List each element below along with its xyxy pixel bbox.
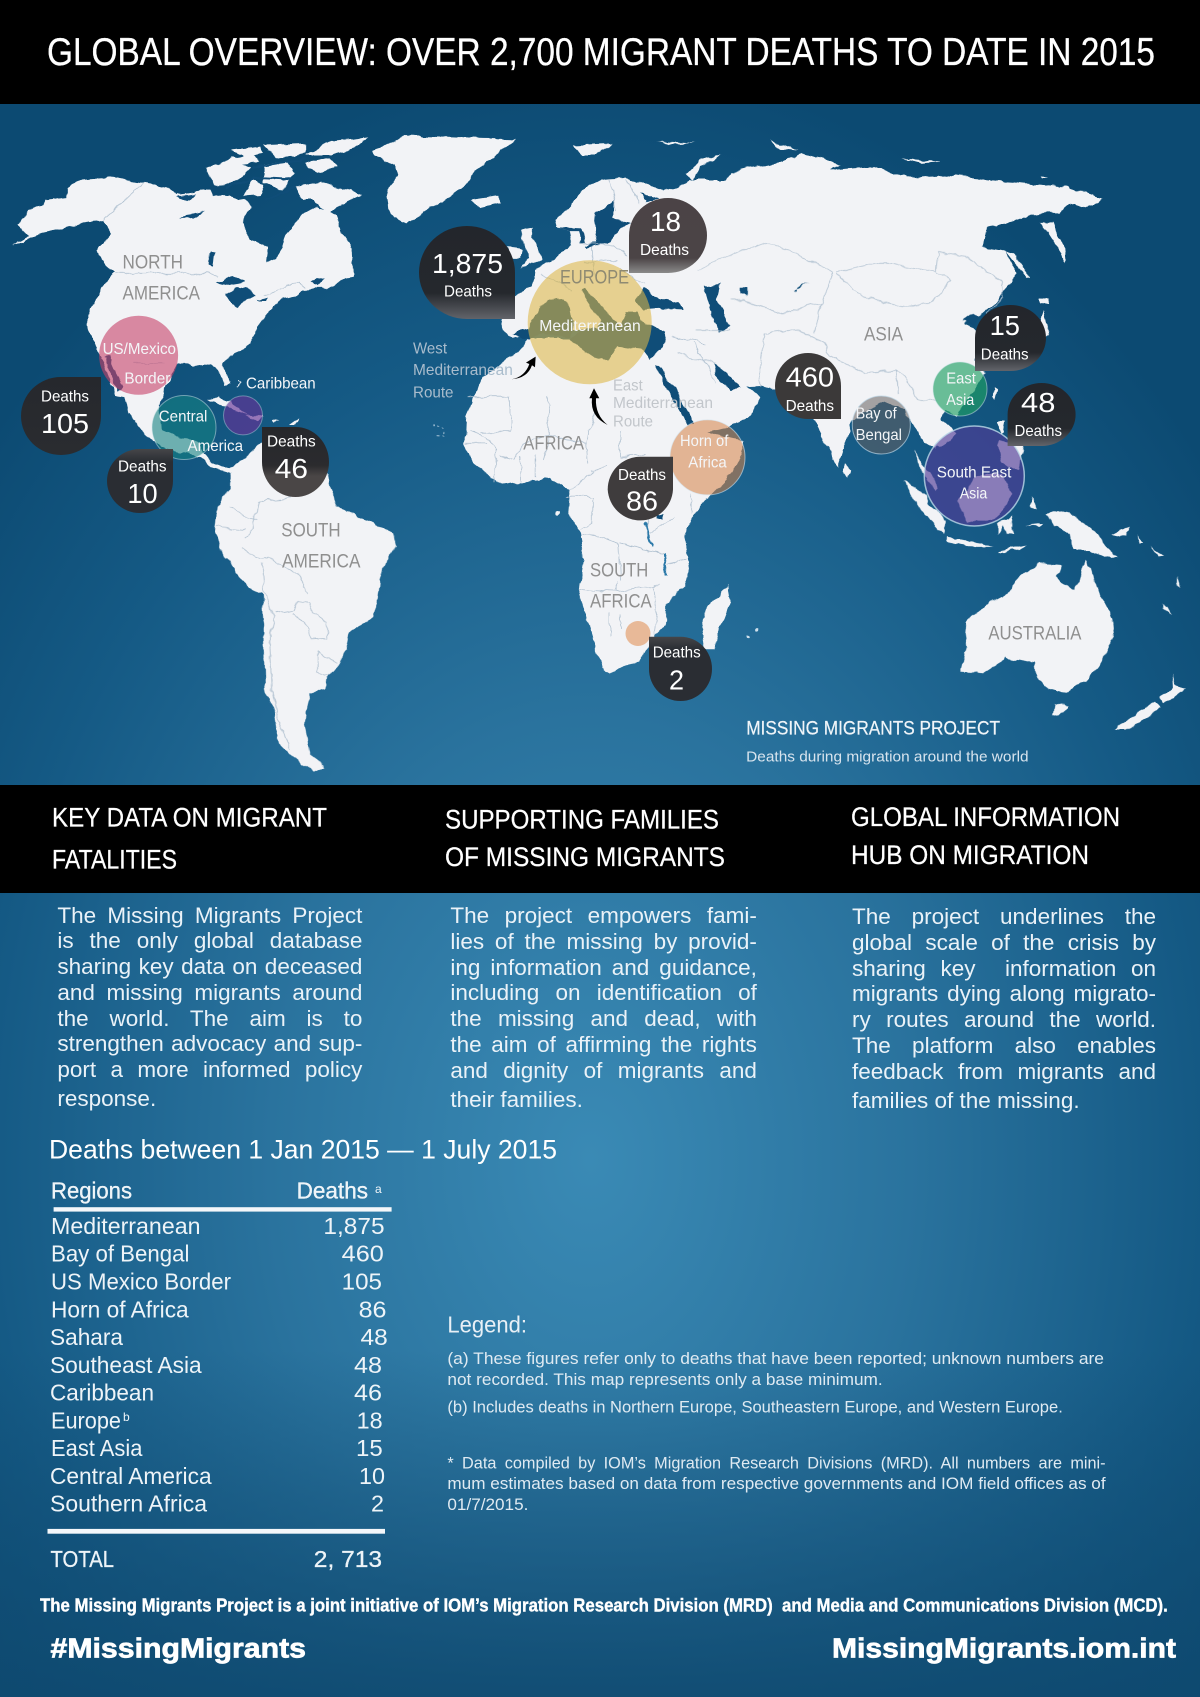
table rows: 48 xyxy=(360,1324,388,1350)
bubble: mediterranean 1,875 deaths: Deaths xyxy=(444,284,492,301)
circle: south east asia xyxy=(924,426,1024,526)
table rows: US Mexico Border xyxy=(51,1268,231,1294)
region labels xyxy=(103,318,1012,502)
text: supporting families body: their families. xyxy=(450,1087,583,1112)
text: key data body: is the only global database xyxy=(57,928,362,953)
region labels: America xyxy=(188,438,243,455)
route labels: Route xyxy=(413,385,454,402)
table rows: Caribbean xyxy=(50,1380,154,1406)
land: south america xyxy=(214,440,396,772)
heading: supporting families xyxy=(445,804,725,872)
text: information hub body: The platform also enables xyxy=(852,1033,1156,1058)
world map xyxy=(11,136,1186,772)
bubble: east asia 15 deaths: 15 xyxy=(990,310,1020,341)
bubble: central america 10 deaths xyxy=(107,449,173,513)
table header xyxy=(51,1177,392,1212)
heading: key data: KEY DATA ON MIGRANT xyxy=(52,803,327,833)
circle: caribbean xyxy=(224,396,262,435)
bubble: horn of africa 86 deaths: 86 xyxy=(626,486,658,517)
text: information hub body: families of the missing. xyxy=(852,1088,1080,1113)
text: information hub body xyxy=(852,904,1156,1113)
continent labels: SOUTH xyxy=(590,561,648,582)
region labels: Mediterranean xyxy=(539,318,641,335)
continent labels: AFRICA xyxy=(590,591,652,612)
bubble: horn of africa 86 deaths: Deaths xyxy=(618,467,666,484)
region labels: Asia xyxy=(946,392,974,409)
continent labels: AMERICA xyxy=(282,551,361,572)
region labels: Border xyxy=(124,370,171,387)
bubble: caribbean 46 deaths: 46 xyxy=(275,453,308,484)
land: southeast asia and oceania xyxy=(904,440,1186,730)
region labels: Bengal xyxy=(856,427,902,444)
text: information hub body: The project underlines the xyxy=(852,904,1156,929)
heading: information hub xyxy=(851,802,1120,870)
bubble: mediterranean 1,875 deaths xyxy=(419,226,515,319)
text: key data body: and missing migrants around xyxy=(57,980,362,1005)
heading: information hub: HUB ON MIGRATION xyxy=(851,840,1089,870)
bubble: central america 10 deaths: Deaths xyxy=(118,459,166,476)
table rows: Europe xyxy=(51,1407,121,1433)
table rows: 86 xyxy=(359,1296,386,1322)
bubble: us mexico border 105 deaths: Deaths xyxy=(41,389,89,406)
bubble: europe 18 deaths: Deaths xyxy=(640,242,689,259)
continents xyxy=(11,136,1186,772)
bubble: bay of bengal 460 deaths: Deaths xyxy=(786,398,834,415)
text: supporting families body: The project empowers fami- xyxy=(450,903,757,928)
circle: horn of africa xyxy=(670,420,745,495)
heading: key data xyxy=(52,803,327,874)
region labels: Caribbean xyxy=(246,375,316,392)
route labels: Mediterranean xyxy=(613,395,713,412)
region labels: Horn of xyxy=(680,433,729,450)
table rows: Sahara xyxy=(50,1324,123,1350)
hashtag: #MissingMigrants xyxy=(50,1632,306,1663)
text: key data body: sharing key data on deceased xyxy=(57,954,362,979)
regional circles xyxy=(99,260,1024,646)
bubble: southeast asia 48 deaths: 48 xyxy=(1021,387,1055,418)
table header: Regions xyxy=(51,1177,132,1203)
circle: east asia xyxy=(933,362,987,416)
bubble: east asia 15 deaths xyxy=(975,305,1046,371)
bubble: mediterranean 1,875 deaths: 1,875 xyxy=(432,248,503,279)
bubble: bay of bengal 460 deaths xyxy=(775,353,841,419)
bubble: horn of africa 86 deaths xyxy=(608,457,673,520)
table rows: Bay of Bengal xyxy=(51,1241,189,1267)
table rows: Southeast Asia xyxy=(50,1352,202,1378)
text: information hub body: migrants dying along migrato- xyxy=(852,981,1156,1006)
legend xyxy=(447,1312,1104,1417)
text: key data body: response. xyxy=(57,1086,156,1111)
circle: southern africa xyxy=(626,621,650,646)
table header: a xyxy=(375,1182,382,1196)
map caption: Deaths during migration around the world xyxy=(746,749,1029,766)
circle: bay of bengal xyxy=(852,396,910,454)
table rows: 15 xyxy=(356,1435,383,1461)
heading: supporting families: SUPPORTING FAMILIES xyxy=(445,804,719,834)
circle: central america xyxy=(152,396,216,460)
bubble: southern africa 2 deaths: Deaths xyxy=(653,645,701,662)
region labels: US/Mexico xyxy=(103,341,176,358)
continent labels xyxy=(122,252,1082,644)
text: supporting families body: the missing and dead, with xyxy=(450,1006,757,1031)
text: key data body: strengthen advocacy and sup- xyxy=(57,1031,362,1056)
heading: information hub: GLOBAL INFORMATION xyxy=(851,802,1120,832)
text: information hub body: feedback from migrants and xyxy=(852,1059,1156,1084)
heading: supporting families: OF MISSING MIGRANTS xyxy=(445,842,725,872)
land: asia xyxy=(600,140,1101,478)
table rows: Horn of Africa xyxy=(51,1296,189,1322)
table rows: b xyxy=(123,1410,130,1424)
data source note: 01/7/2015. xyxy=(447,1495,528,1514)
legend: Legend: xyxy=(447,1312,527,1338)
circle: mediterranean xyxy=(528,260,652,384)
bubble: europe 18 deaths xyxy=(629,198,707,273)
bubble: caribbean 46 deaths xyxy=(262,427,329,497)
region labels: Bay of xyxy=(856,405,897,422)
arrow: west mediterranean route xyxy=(512,357,536,379)
bubble: east asia 15 deaths: Deaths xyxy=(981,346,1029,363)
legend: not recorded. This map represents only a base minimum. xyxy=(447,1370,883,1389)
land: north america and greenland xyxy=(11,136,517,473)
text: information hub body: global scale of the crisis by xyxy=(852,930,1156,955)
text: key data body: The Missing Migrants Project xyxy=(57,902,362,928)
continent labels: EUROPE xyxy=(560,267,629,288)
bubble: us mexico border 105 deaths: 105 xyxy=(41,408,89,439)
continent labels: AMERICA xyxy=(122,283,200,304)
data source note: * Data compiled by IOM’s Migration Research Divisions (MRD). All numbers are mini- xyxy=(447,1453,1106,1472)
table rows: Mediterranean xyxy=(51,1213,200,1239)
route labels: Mediterranean xyxy=(413,362,513,379)
continent labels: ASIA xyxy=(864,325,903,346)
text: supporting families body: the aim of affirming the rights xyxy=(450,1032,757,1057)
region labels: Asia xyxy=(960,485,987,502)
bubble: central america 10 deaths: 10 xyxy=(127,478,158,509)
bubble: europe 18 deaths: 18 xyxy=(650,206,681,237)
text: key data body xyxy=(57,902,362,1111)
legend: (a) These figures refer only to deaths that have been reported; unknown numbers are xyxy=(447,1349,1104,1368)
bubble: southeast asia 48 deaths xyxy=(1008,383,1076,446)
table total: 2, 713 xyxy=(314,1546,382,1572)
arrow: east mediterranean route xyxy=(589,388,608,425)
bubble: southern africa 2 deaths: 2 xyxy=(669,664,684,695)
continent labels: SOUTH xyxy=(281,521,341,542)
data source note: mum estimates based on data from respective governments and IOM field offices as of xyxy=(447,1474,1106,1493)
bubble: caribbean 46 deaths: Deaths xyxy=(267,434,316,451)
text: key data body: the world. The aim is to xyxy=(57,1006,362,1031)
region labels: South East xyxy=(937,464,1012,481)
text: supporting families body: and dignity of migrants and xyxy=(450,1058,757,1083)
section header band xyxy=(0,785,1200,893)
legend: (b) Includes deaths in Northern Europe, Southeastern Europe, and Western Europe. xyxy=(447,1398,1063,1417)
table header: Deaths xyxy=(297,1177,368,1203)
continent labels: NORTH xyxy=(122,252,183,273)
seas and lakes xyxy=(104,180,1004,425)
table rows: 18 xyxy=(357,1407,383,1433)
text: supporting families body: including on identification of xyxy=(450,980,757,1005)
circle: us/mexico border xyxy=(99,316,178,395)
table rows: Central America xyxy=(50,1463,212,1489)
land: africa xyxy=(434,338,758,673)
title banner xyxy=(0,0,1200,104)
route labels xyxy=(413,340,713,431)
region labels: East xyxy=(946,370,976,387)
continent labels: AUSTRALIA xyxy=(988,623,1082,644)
table rows: 48 xyxy=(354,1352,382,1378)
table total xyxy=(48,1529,385,1572)
data source note xyxy=(447,1453,1106,1514)
bubble: southeast asia 48 deaths: Deaths xyxy=(1014,423,1062,440)
table rows: 2 xyxy=(371,1491,384,1517)
region labels: Africa xyxy=(688,455,727,472)
continent labels: AFRICA xyxy=(523,433,584,454)
heading: key data: FATALITIES xyxy=(52,844,177,874)
text: information hub body: sharing key information on xyxy=(852,956,1156,981)
text: information hub body: ry routes around the world. xyxy=(852,1007,1156,1032)
table title: Deaths between 1 Jan 2015 — 1 July 2015 xyxy=(49,1135,557,1165)
region labels: Central xyxy=(159,409,207,426)
bubble: us mexico border 105 deaths xyxy=(21,377,101,455)
table rows: East Asia xyxy=(51,1435,143,1461)
text: supporting families body: ing information and guidance, xyxy=(450,955,757,980)
bubble: bay of bengal 460 deaths: 460 xyxy=(786,362,834,393)
map caption: MISSING MIGRANTS PROJECT xyxy=(746,718,1000,739)
table: deaths by region xyxy=(48,1135,557,1572)
table rows: Southern Africa xyxy=(50,1491,207,1517)
table rows xyxy=(50,1213,388,1517)
map caption xyxy=(746,718,1029,766)
route labels: East xyxy=(613,378,643,395)
text: supporting families body: lies of the missing by provid- xyxy=(450,929,757,954)
table rows: 460 xyxy=(342,1241,384,1267)
text: key data body: port a more informed policy xyxy=(57,1057,362,1082)
bubble: southern africa 2 deaths xyxy=(649,637,712,701)
table rows: 1,875 xyxy=(323,1213,385,1239)
route labels: Route xyxy=(613,414,653,431)
table rows: 105 xyxy=(342,1268,382,1294)
table rows: 10 xyxy=(359,1463,385,1489)
land: europe and western eurasia xyxy=(502,142,740,383)
website: MissingMigrants.iom.int xyxy=(832,1633,1176,1664)
table rows: 46 xyxy=(354,1380,382,1406)
table total: TOTAL xyxy=(50,1546,114,1572)
text: supporting families body xyxy=(450,903,757,1112)
route labels: West xyxy=(413,340,448,357)
